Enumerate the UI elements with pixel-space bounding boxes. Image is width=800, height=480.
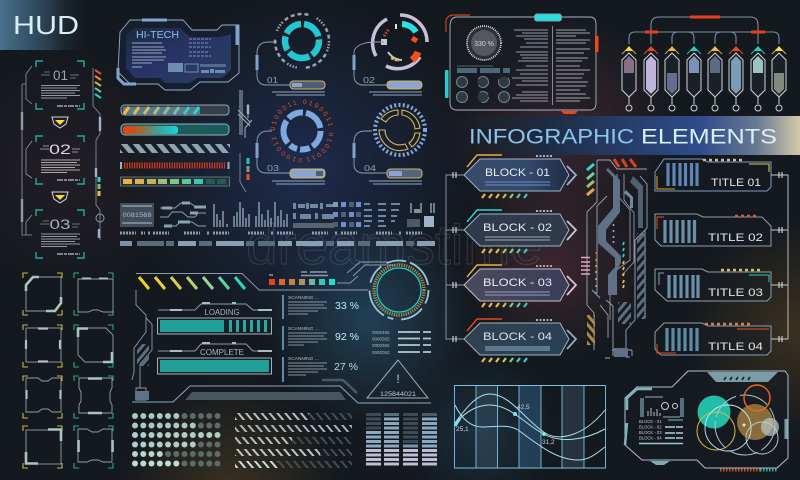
list item 03: [36, 210, 84, 258]
gauge: dial: [467, 26, 501, 60]
icon: small circle node: [96, 214, 104, 222]
complete header: COMPLETE: [200, 347, 244, 357]
scan row 27%: 27 %: [334, 361, 358, 373]
icon: colored stripes top: [95, 70, 101, 98]
heading: HI-TECH: HI-TECH: [136, 30, 179, 41]
chart: circle gauge 01: [257, 14, 329, 95]
arrow: down triangle 1: [52, 117, 68, 128]
block 01: BLOCK - 01: [485, 167, 550, 179]
title 03: TITLE 03: [708, 287, 763, 299]
icon: colored dashes middle: [98, 177, 100, 196]
list text: [639, 419, 683, 444]
outline: [132, 262, 395, 400]
dots: orange to teal: [595, 252, 597, 294]
bar 3: hatched bar: [120, 144, 230, 153]
title 02: TITLE 02: [708, 232, 763, 244]
stripes: colored left: [587, 164, 594, 195]
panel: dashboard screen top right: [445, 14, 598, 114]
counter box: [120, 203, 154, 227]
chart: circle gauge 02: 02: [363, 75, 375, 85]
dash list: [364, 204, 400, 226]
list item 02: [36, 136, 84, 184]
circles diagram: [697, 385, 779, 455]
mini data list: [372, 330, 431, 355]
mini data list: 0000365: [372, 336, 390, 342]
block 01: [453, 155, 576, 198]
chart: level columns: [366, 414, 437, 464]
mini data list: 0000365: [372, 343, 390, 348]
panel: bottom right scope: [625, 371, 788, 470]
counter box: 0081568: [122, 212, 152, 219]
scan row 33%: [283, 295, 359, 319]
loading header: [158, 303, 272, 317]
stripes: grey hatch: [637, 233, 646, 319]
block 04: [453, 319, 576, 362]
list item 01: 01: [53, 68, 68, 83]
panel: titles: [655, 159, 788, 355]
signal lines: [160, 203, 206, 226]
chart: line graph: 42,5: [517, 404, 530, 411]
curve A: [455, 394, 605, 437]
list item 02: 02: [49, 142, 71, 157]
text block: [132, 43, 166, 67]
base box: [135, 391, 149, 400]
title 02: [655, 214, 782, 246]
scan row 33%: SCANNING ...: [288, 295, 319, 301]
block row: [120, 241, 435, 246]
capsule 3: [665, 46, 679, 111]
bar 5: segment bar: [120, 177, 230, 186]
squares grid: [333, 202, 361, 227]
icon: six small dials: [456, 76, 510, 102]
connectors: [629, 17, 779, 44]
block widgets: [293, 203, 334, 228]
stripes: amber hatch: [587, 315, 595, 345]
ring gauge: [370, 260, 428, 320]
complete bar: [158, 358, 272, 374]
heading: HUD: HUD: [13, 10, 79, 40]
complete header: [158, 343, 272, 357]
capsule 6: [729, 46, 743, 111]
capsule 5: [708, 46, 722, 111]
mini chart: [640, 397, 684, 420]
box: base block: [614, 348, 628, 357]
dashes: cyan to yellow: [623, 242, 624, 288]
block 02: [453, 210, 576, 253]
panel: data strip: [120, 202, 435, 246]
triangle warning: [367, 360, 428, 398]
chart: line graph: [454, 385, 606, 468]
bar 4: tick bar: [121, 162, 228, 169]
block 04: BLOCK - 04: [483, 331, 552, 343]
text column left: [512, 30, 548, 101]
chart: circle gauge 02: [354, 15, 427, 95]
base tray: [132, 380, 431, 403]
block 03: [453, 265, 576, 307]
title band: INFOGRAPHIC ELEMENTS: ELEMENTS: [641, 126, 777, 148]
block 03: BLOCK - 03: [483, 277, 552, 289]
panel: capsule gauges with connectors: [622, 17, 786, 111]
capsule 4: [687, 46, 701, 111]
panel: circuit column: [581, 159, 647, 358]
list text: BLOCK - 03: [639, 430, 662, 435]
squares: red to cyan: [269, 279, 335, 285]
gauge: dial: 330 %: [474, 41, 494, 48]
capsule 1: [622, 46, 636, 111]
connector right: [771, 175, 788, 339]
scan row 92%: 92 %: [335, 331, 359, 343]
icon: pink menu lines: [581, 258, 590, 274]
scan row 92%: SCANNING ...: [288, 326, 319, 332]
chart: circle gauge 03: 03: [267, 163, 279, 173]
chart: line graph: 31,2: [542, 439, 555, 446]
panel: progress bars: [120, 90, 252, 192]
title band: INFOGRAPHIC ELEMENTS: INFOGRAPHIC: [469, 126, 634, 148]
curve B: [455, 405, 605, 440]
decoration: right connectors: [238, 90, 252, 192]
chart: circle gauge 04: 04: [364, 163, 376, 173]
list item 01: [36, 61, 84, 109]
curve C: [455, 405, 605, 460]
bar: central grey conduit: [598, 168, 621, 295]
small labels: [457, 66, 510, 73]
bar 1: striped progress: [121, 105, 229, 115]
title 04: [655, 323, 782, 355]
chart: circle gauge 01: 01: [267, 75, 278, 85]
list text: BLOCK - 02: [639, 424, 662, 430]
triangle warning: 125844021: [380, 391, 416, 398]
mini tiles: [407, 203, 434, 227]
connector left: [446, 175, 464, 339]
chart: line graph: 25,1: [456, 426, 469, 433]
capsule 7: [751, 46, 765, 111]
title 01: TITLE 01: [711, 177, 761, 189]
mini data list: 0000456: [372, 330, 390, 335]
panel: frames: [23, 273, 113, 468]
chart: circle gauge 03: [256, 100, 334, 184]
frame set: yellow column: [23, 273, 62, 468]
title band: INFOGRAPHIC ELEMENTS: [445, 116, 800, 155]
chart: circle gauge 04: [354, 105, 425, 184]
heading: HUD: [0, 0, 88, 50]
watermark: dreamstime: [246, 213, 542, 276]
scan row 27%: [283, 356, 358, 382]
panel: blocks: [446, 155, 576, 362]
bar chart: [214, 202, 287, 227]
stripes: red top: [614, 159, 636, 167]
dash row: [120, 232, 422, 234]
stripes: yellow to teal: [139, 277, 245, 289]
list text: BLOCK - 04: [639, 436, 662, 440]
text column right: [556, 30, 590, 101]
bar 2: gradient progress: [121, 124, 229, 135]
panel: HI-TECH screen: [118, 20, 239, 90]
title 03: [655, 269, 782, 301]
scan row 92%: [283, 326, 359, 350]
dots: blue small: [612, 224, 614, 243]
capsule 8: [772, 46, 786, 111]
hatch: [137, 344, 149, 366]
panel: numbered list 01-03: [22, 61, 104, 258]
frame set: teal column: [74, 273, 113, 468]
list item 03: 03: [50, 217, 70, 232]
scan row 27%: SCANNING ...: [288, 356, 319, 362]
data widgets: [168, 63, 226, 73]
panel: loading console: [132, 260, 431, 403]
chart: hatched rows: [235, 413, 352, 468]
title 01: [655, 159, 782, 191]
mini data list: 0000052: [372, 350, 390, 355]
title 04: TITLE 04: [708, 341, 763, 353]
capsule 2: [644, 46, 658, 111]
scan row 33%: 33 %: [335, 300, 359, 312]
loading bar: [158, 318, 272, 334]
triangle warning: !: [396, 372, 400, 386]
arrow: down triangle 2: [52, 192, 68, 203]
chart: circle gauge 03: 0100011 0100011 0100011 0100011: [270, 100, 334, 162]
loading header: LOADING: [204, 307, 240, 317]
block 02: BLOCK - 02: [483, 222, 552, 234]
chart: dot matrix: [132, 413, 220, 466]
text block right: [189, 39, 211, 56]
list text: BLOCK - 01: [639, 419, 662, 424]
